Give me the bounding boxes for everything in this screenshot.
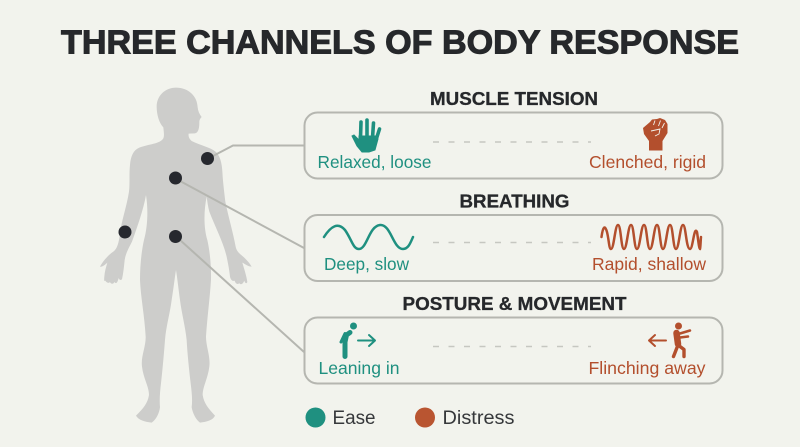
panel: breathing [304, 215, 722, 281]
label: clenched: Clenched, rigid [589, 152, 706, 172]
icon: clenched fist [643, 118, 668, 150]
legend [306, 408, 514, 429]
marker: shoulder [201, 152, 214, 165]
panel: muscle tension [304, 112, 722, 178]
label: deep: Deep, slow [324, 254, 409, 274]
legend swatch: distress [415, 408, 435, 428]
marker: forearm [118, 226, 132, 238]
label: flinching away: Flinching away [588, 358, 706, 378]
label: rapid: Rapid, shallow [592, 254, 706, 274]
dashed divider [433, 141, 591, 143]
icon: open hand [352, 120, 380, 152]
icon: rapid wave [602, 225, 701, 249]
marker: abdomen [169, 230, 182, 243]
connector: shoulder to muscle tension [213, 146, 304, 156]
marker: chest [169, 172, 182, 184]
title: THREE CHANNELS OF BODY RESPONSE [61, 24, 739, 60]
panel: posture and movement [304, 318, 722, 384]
connector: chest to breathing [180, 181, 304, 248]
icon: slow wave [324, 225, 413, 249]
legend label: ease: Ease [332, 408, 376, 429]
body silhouette [100, 88, 252, 423]
heading: muscle tension: MUSCLE TENSION [430, 89, 598, 109]
label: leaning in: Leaning in [318, 358, 400, 378]
heading: breathing: BREATHING [460, 192, 570, 212]
connector: abdomen to posture [180, 240, 304, 352]
dashed divider [433, 346, 591, 348]
label: relaxed: Relaxed, loose [318, 152, 432, 172]
icon: leaning figure with arrow [341, 322, 375, 356]
dashed divider [433, 242, 591, 244]
heading: posture and movement: POSTURE & MOVEMENT [402, 294, 627, 314]
legend swatch: ease [306, 408, 326, 428]
legend label: distress: Distress [442, 408, 514, 429]
icon: flinching figure with arrow [649, 322, 690, 356]
